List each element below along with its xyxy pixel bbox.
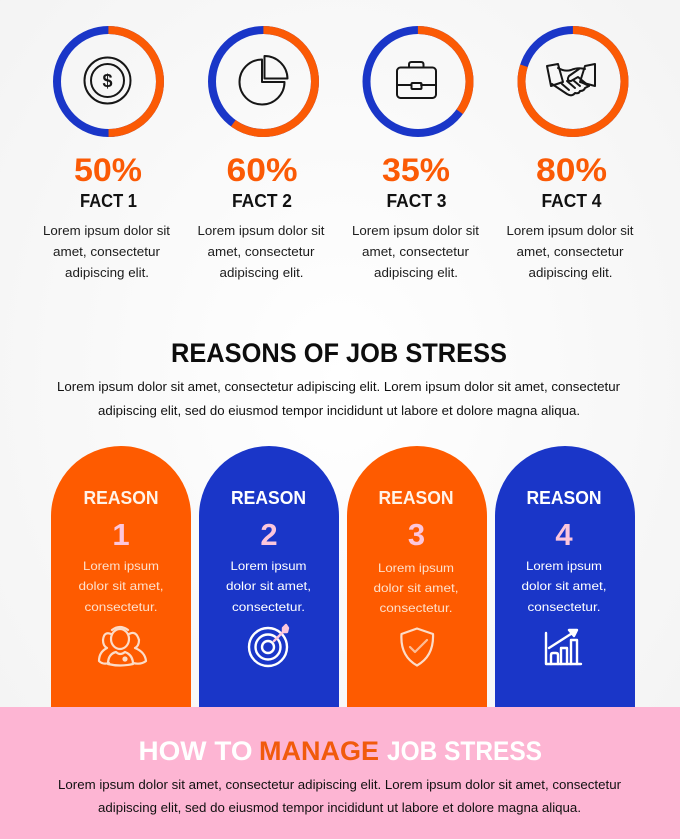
text: reason 4 description: consectetur. [528, 600, 600, 614]
number: 4: 4 [555, 517, 573, 552]
text: reason 4 description [522, 559, 606, 614]
value: 60%: 60% [226, 152, 298, 188]
text: manage description: adipiscing elit, sed do eiusmod tempor incididunt ut labore et dolore magna aliqua. [98, 801, 581, 815]
donut: 60% [212, 30, 315, 133]
icon: dollar coin: $ [102, 71, 113, 91]
donut: 35% [366, 30, 470, 133]
icon: briefcase [397, 62, 436, 98]
text: fact 2 description [198, 224, 325, 280]
heading: how to manage job stress [138, 736, 542, 766]
icon: shield check [401, 628, 433, 666]
panel: fact 2 [198, 30, 325, 280]
pink band [0, 707, 680, 839]
icon: target [249, 625, 288, 666]
label: fact 1: FACT 1 [80, 191, 137, 211]
icon: dollar coin [84, 58, 130, 104]
text: reason 2 description: dolor sit amet, [226, 579, 311, 593]
card shape [199, 446, 339, 708]
heading: how to manage job stress: HOW TO [138, 736, 252, 766]
label: fact 3: FACT 3 [386, 191, 446, 211]
text: reason 4 description: dolor sit amet, [522, 579, 606, 593]
value: 35%: 35% [382, 152, 450, 188]
card shape [347, 446, 487, 708]
panel: how to manage job stress [0, 707, 680, 839]
text: reason 2 description [226, 559, 311, 614]
label: fact 2: FACT 2 [232, 191, 292, 211]
text: reason 4 description: Lorem ipsum [526, 559, 602, 573]
text: reason 3 description: Lorem ipsum [378, 561, 454, 575]
text: fact 2 description: adipiscing elit. [220, 266, 304, 280]
text: fact 1 description: Lorem ipsum dolor sit [43, 224, 171, 238]
value: 80%: 80% [536, 152, 607, 188]
text: fact 3 description [352, 224, 480, 280]
heading: reasons of job stress: REASONS OF JOB STRESS [171, 338, 507, 368]
text: reason 1 description: Lorem ipsum [83, 559, 159, 573]
label: reason: REASON [526, 488, 602, 508]
number: 2: 2 [260, 517, 278, 552]
text: reasons intro: Lorem ipsum dolor sit amet, consectetur adipiscing elit. Lorem ipsum dolor sit amet, consectetur [57, 380, 620, 394]
card shape [495, 446, 635, 708]
text: fact 3 description: Lorem ipsum dolor sit [352, 224, 480, 238]
text: fact 3 description: adipiscing elit. [374, 266, 458, 280]
text: fact 3 description: amet, consectetur [362, 245, 469, 259]
panel: fact 1 [43, 30, 171, 280]
donut: 80% [522, 30, 624, 133]
text: reason 1 description: consectetur. [84, 600, 158, 614]
number: 1: 1 [112, 517, 130, 552]
text: reason 1 description: dolor sit amet, [78, 579, 164, 593]
text: fact 4 description: adipiscing elit. [528, 266, 612, 280]
text: fact 1 description [43, 224, 171, 280]
text: reason 2 description: Lorem ipsum [230, 559, 307, 573]
card shape [51, 446, 191, 708]
text: reasons intro: adipiscing elit, sed do eiusmod tempor incididunt ut labore et dolore magna aliqua. [98, 404, 580, 418]
text: reason 3 description: consectetur. [380, 601, 452, 615]
icon: growth chart [546, 630, 581, 664]
icon: pie chart [240, 56, 288, 104]
text: reasons intro [57, 380, 620, 418]
number: 3: 3 [408, 517, 425, 552]
panel: reason 3 [347, 446, 487, 708]
panel: reason 2 [199, 446, 339, 708]
panel: reason 4 [495, 446, 635, 708]
heading: how to manage job stress: JOB STRESS [387, 736, 542, 766]
text: reason 3 description [374, 561, 458, 615]
panel: reason 1 [51, 446, 191, 708]
label: reason: REASON [231, 488, 306, 508]
icon: people group [99, 627, 146, 666]
label: fact 4: FACT 4 [542, 191, 602, 211]
value: 50%: 50% [74, 152, 142, 188]
label: reason: REASON [84, 488, 158, 508]
text: fact 2 description: amet, consectetur [208, 245, 314, 259]
text: fact 1 description: amet, consectetur [53, 245, 160, 259]
text: fact 1 description: adipiscing elit. [65, 266, 149, 280]
heading: how to manage job stress: MANAGE [259, 736, 379, 766]
text: reason 1 description [78, 559, 164, 614]
text: reason 3 description: dolor sit amet, [374, 581, 458, 595]
text: fact 4 description: Lorem ipsum dolor sit [506, 224, 634, 238]
donut: 50% [57, 30, 160, 133]
text: manage description [58, 778, 621, 815]
icon: handshake [547, 64, 595, 95]
panel: fact 4 [506, 30, 634, 280]
panel: fact 3 [352, 30, 480, 280]
text: fact 4 description: amet, consectetur [516, 245, 624, 259]
text: fact 2 description: Lorem ipsum dolor sit [198, 224, 325, 238]
text: fact 4 description [506, 224, 634, 280]
label: reason: REASON [378, 488, 454, 508]
text: manage description: Lorem ipsum dolor sit amet, consectetur adipiscing elit. Lorem ipsum dolor sit amet, consectetur [58, 778, 621, 792]
text: reason 2 description: consectetur. [232, 600, 305, 614]
